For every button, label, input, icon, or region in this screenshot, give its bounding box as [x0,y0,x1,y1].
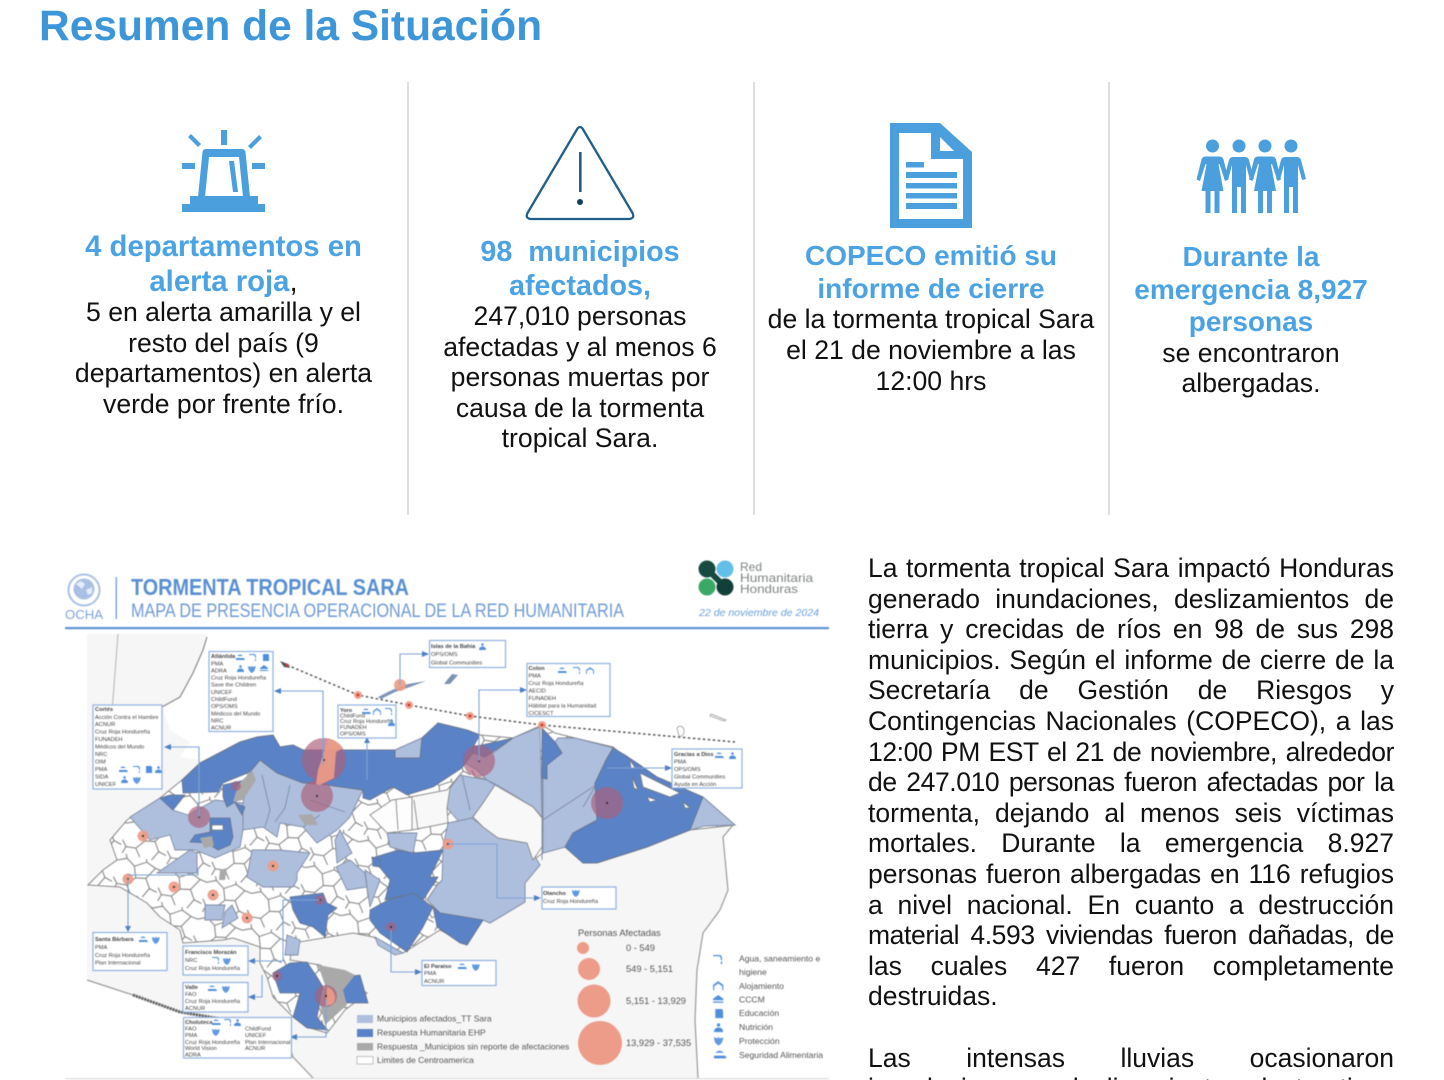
text block: narrative: generado inundaciones, deslizamientos de [868,584,1394,614]
text: alert detail: verde por frente frío. [103,389,344,419]
text: personas afectadas: afectadas y al menos 6 [443,332,717,362]
map: sea route of the storm [287,665,735,742]
callout: Francisco Morazán: Francisco Morazán [185,950,237,956]
panel: municipios afectados [443,126,717,453]
panel: alerta roja [75,130,372,419]
callout: Choluteca: Cruz Roja Hondureña [185,1040,241,1046]
callout: Gracias a Dios: OPS/OMS [674,767,701,773]
callout: Choluteca: ChildFund [245,1026,271,1032]
text: alert detail: resto del país (9 [128,328,319,358]
heading: municipios afectados: afectados, [509,270,651,302]
callout: Colón: Colon [528,666,545,672]
text: informe detail: el 21 de noviembre a las [786,335,1076,365]
callout: Cortés: Acción Contra el Hambre [95,715,159,721]
callout: Choluteca: ACNUR [245,1046,265,1052]
heading: departamentos en alerta roja: 4 departamentos en [85,230,362,263]
callout: Olancho [542,887,616,909]
heading: COPECO informe [805,240,1057,304]
map: large inner district lines [262,728,596,860]
logo text: OCHA: OCHA [65,607,103,622]
callout: Cortés: ACNUR [95,722,115,728]
callout: Valle: Valle [185,985,198,991]
text block: narrative: destruidas. [868,981,998,1011]
legend: sectors [713,954,823,1060]
callout: El Paraíso [422,960,496,986]
map: affected-people circles over response areas [188,738,623,1007]
callout: Gracias a Dios: PMA [674,760,687,766]
callout: Atlántida [209,652,273,732]
callout: Cortés [93,705,162,789]
heading: municipios afectados [480,236,680,302]
callout: Atlántida: ACNUR [211,726,231,732]
heading: COPECO informe: COPECO emitió su [805,240,1057,271]
text: alert detail: departamentos) en alerta [75,358,372,388]
callout: Santa Bárbara: Santa Bárbara [95,937,134,943]
date: 22 de noviembre de 2024 [698,608,819,619]
map: lagoons [212,760,690,830]
callout: Gracias a Dios: Ayuda en Acción [674,782,716,788]
callout: Atlántida: Médicos del Mundo [211,712,260,718]
callout: Atlántida: Save the Children [211,682,256,688]
text block: narrative: a nivel nacional. En cuanto a destrucción [868,890,1394,920]
text block: narrative: personas fueron albergadas en 116 refugios [868,859,1394,889]
legend: personas afectadas: Personas Afectadas [578,928,661,938]
callout: Yoro [338,705,396,738]
heading: durante la emergencia: Durante la [1183,241,1319,272]
text: personas afectadas: causa de la tormenta [456,392,704,422]
text block: narrative: Las intensas lluvias ocasionaron [868,1042,1394,1072]
callout: Cortés: SIDA [95,774,108,780]
legend: map categories: Respuesta _Municipios sin reporte de afectaciones [377,1042,569,1052]
heading: departamentos en alerta roja: alerta roja, [149,264,298,298]
callout: Atlántida: ADRA [211,668,227,674]
text block: narrative: La tormenta tropical Sara impactó Honduras [868,553,1394,583]
logo: Red Humanitaria Honduras: Humanitaria [740,571,813,585]
callout: Valle: FAO [185,992,197,998]
callout: Atlántida: OPS/OMS [211,704,238,710]
legend: sectors: Alojamiento [739,981,784,991]
heading: durante la emergencia [1134,241,1368,337]
text: alert detail: 5 en alerta amarilla y el [86,297,361,327]
callout: Colón [527,664,610,717]
text: personas afectadas: 247,010 personas [474,301,686,331]
heading: departamentos en alerta roja [85,230,362,298]
map: leader lines [128,654,668,1037]
text: albergadas [1162,338,1340,398]
callout: Colón: CICESCT [528,711,554,717]
callout: Colón: Cruz Roja Hondureña [528,681,584,687]
callout: Atlántida: UNICEF [211,690,233,696]
icon: siren [182,130,265,212]
legend: sectors: Seguridad Alimentaria [739,1050,823,1060]
callout: Colón: FUNADEH [528,696,556,702]
text block: narrative: Contingencias Nacionales (COPECO), a las [868,706,1394,736]
callout: Choluteca: FAO [185,1026,197,1032]
callout: Choluteca: PMA [185,1033,198,1039]
legend: sectors: Nutrición [739,1022,773,1032]
callout: Islas de la Bahía [430,640,506,668]
text block: narrative [868,553,1394,1080]
callout: Islas de la Bahía: Global Communities [431,660,482,666]
callout: El Paraíso: ACNUR [424,979,444,985]
legend: sectors: Educación [739,1008,779,1018]
icon: warning triangle [526,126,634,220]
legend: map categories: Limites de Centroamerica [377,1055,474,1065]
map header [65,560,829,629]
callout: Cortés: NRC [95,752,107,758]
callout: Gracias a Dios: Gracias a Dios [674,752,714,758]
callout: Cortés: Médicos del Mundo [95,744,144,750]
text block: narrative: de 247.010 personas fueron afectadas por la [868,767,1394,797]
text: informe detail [768,304,1094,396]
callout: Valle: ACNUR [185,1006,205,1012]
callout: Santa Bárbara: Plan Internacional [95,960,141,966]
icon: OCHA UN emblem [68,574,100,606]
heading: municipios afectados: 98 municipios [480,236,680,268]
callout: Cortés: OIM [95,760,106,766]
text: albergadas: albergadas. [1182,368,1320,398]
callout: Santa Bárbara [93,932,167,970]
map: land background [87,634,733,1078]
callout: Choluteca: Plan Internacional [245,1040,291,1046]
callout: Yoro: Yoro [340,708,353,714]
icon: group of people [1196,140,1306,213]
legend: sectors: higiene [739,967,767,977]
callout: Atlántida: Atlántida [211,654,236,660]
heading: COPECO informe: informe de cierre [817,273,1045,304]
heading: durante la emergencia: personas [1189,306,1313,337]
text: personas afectadas: tropical Sara. [502,423,658,453]
callout: Yoro: Cruz Roja Hondureña [340,719,394,725]
callout: Cortés: Cortés [95,707,113,713]
text: personas afectadas: personas muertas por [451,362,709,392]
callout: Olancho: Olancho [543,891,566,897]
map: no-report municipalities (gray) [200,770,355,1025]
callout: Choluteca: UNICEF [245,1033,267,1039]
callout: Atlántida: NRC [211,718,223,724]
callout: Francisco Morazán: Cruz Roja Hondureña [185,966,241,972]
map: presencia operacional de la red humanitaria [64,560,830,1080]
callout: Santa Bárbara: Cruz Roja Hondureña [95,953,151,959]
legend: sectors: Protección [739,1036,780,1046]
text block: narrative: tormenta, dejando al menos seis víctimas [868,798,1394,828]
callout: Cortés: Cruz Roja Hondureña [95,730,151,736]
callout: Gracias a Dios [672,749,742,788]
panel: informe de cierre [768,123,1094,396]
text block: narrative: 12:00 PM EST el 21 de noviembre, alrededor [868,737,1394,767]
text block: narrative: municipios. Según el informe de cierre de la [868,645,1394,675]
callout: Choluteca: World Vision [185,1046,217,1052]
heading: tormenta tropical Sara: TORMENTA TROPICAL SARA [131,574,409,600]
callout: Atlántida: Cruz Roja Hondureña [211,676,267,682]
heading: durante la emergencia: emergencia 8,927 [1134,274,1368,304]
logo: Red Humanitaria Honduras: Honduras [740,582,798,596]
callout: Gracias a Dios: Global Communities [674,774,725,780]
legend: map categories: Municipios afectados_TT Sara [377,1014,492,1024]
text block: narrative: Secretaría de Gestión de Riesgos y [868,675,1394,705]
text block: narrative: material 4.593 viviendas fueron dañadas, de [868,920,1394,950]
panel: personas albergadas [1134,140,1368,398]
legend: personas afectadas: 549 - 5,151 [626,964,673,974]
callout: Islas de la Bahía: OPS/OMS [431,652,458,658]
legend: personas afectadas [577,928,691,1065]
callout: Yoro: ChildFund [340,714,365,720]
callout: Choluteca: Choluteca [185,1020,213,1026]
callout: Cortés: FUNADEH [95,737,122,743]
callout: Colón: AECID [528,688,546,694]
legend: personas afectadas: 5,151 - 13,929 [626,996,686,1006]
callout: El Paraíso: PMA [424,971,437,977]
text block: narrative: las cuales 427 fueron completamente [868,951,1394,981]
map: humanitarian response (dark) [160,723,703,1030]
title: Resumen de la Situación [39,3,542,50]
text: informe detail: 12:00 hrs [876,366,986,396]
subheading: mapa de presencia operacional: MAPA DE PRESENCIA OPERACIONAL DE LA RED HUMANITARIA [131,601,624,622]
callout: Valle [183,982,248,1012]
callout: Choluteca: ADRA [185,1052,201,1058]
text block: narrative: mortales. Durante la emergencia 8.927 [868,828,1394,858]
callout: Choluteca [184,1018,292,1058]
callout: El Paraíso: El Paraíso [424,964,452,970]
map: affected-people circles on unaffected areas [122,679,546,1006]
callout: Cortés: UNICEF [95,782,117,788]
legend: map categories: Respuesta Humanitaria EHP [377,1028,486,1038]
callout: Atlántida: PMA [211,662,224,668]
text block: narrative: tierra y crecidas de ríos en 98 de sus 298 [868,614,1394,644]
callout: Santa Bárbara: PMA [95,945,108,951]
callout: Colón: Hábitat para la Humanidad [528,704,596,710]
text: personas afectadas [443,301,717,453]
logo: Red Humanitaria Honduras [698,560,813,596]
legend: personas afectadas: 0 - 549 [626,943,655,953]
legend: map categories [357,1014,569,1065]
text: alert detail [75,297,372,419]
callout: Cortés: PMA [95,767,108,773]
text: informe detail: de la tormenta tropical Sara [768,304,1094,334]
callout: Yoro: OPS/OMS [340,732,366,738]
map: affected municipalities (light) [130,727,735,955]
map: islands [280,661,726,736]
callout: Francisco Morazán [183,946,248,975]
map: Honduras base municipalities [88,723,735,1033]
logo: Red Humanitaria Honduras: Red [740,560,762,574]
legend: personas afectadas: 13,929 - 37,535 [626,1038,691,1048]
map: white pockets [410,775,542,918]
callout: Olancho: Cruz Roja Hondureña [543,899,599,905]
callout: Francisco Morazán: NRC [185,958,197,964]
callout: Colón: PMA [528,674,541,680]
callout: Yoro: FUNADEH [340,725,367,731]
callout: Valle: Cruz Roja Hondureña [185,999,241,1005]
legend: sectors: Agua, saneamiento e [739,954,820,964]
legend: sectors: CCCM [739,994,765,1004]
callout: Atlántida: ChildFund [211,697,237,703]
icon: document [890,123,972,228]
text: albergadas: se encontraron [1162,338,1340,368]
callout: Islas de la Bahía: Islas de la Bahía [431,644,476,650]
